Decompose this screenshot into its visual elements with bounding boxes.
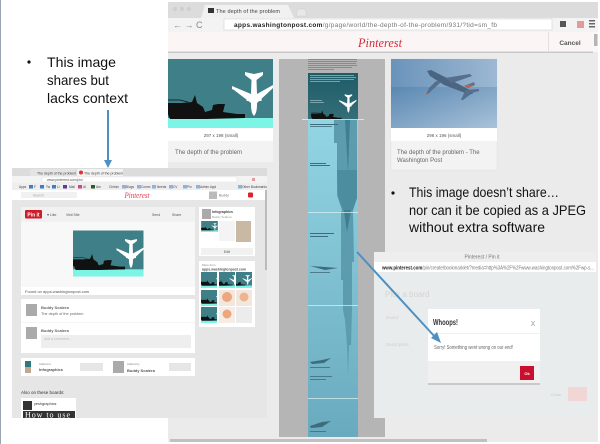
callout: image does not share: without extra software bbox=[408, 219, 545, 235]
infographic intro text lines bbox=[308, 59, 357, 70]
comments card: Buddy Scalera bbox=[41, 305, 70, 310]
faded form behind dialog: Close bbox=[551, 392, 562, 397]
pinterest header: Pinterest bbox=[124, 191, 150, 200]
popup title bar: Pinterest / Pin it bbox=[464, 254, 500, 260]
infographic sky section bbox=[308, 73, 358, 120]
bookmarks bar: Admin Appl bbox=[200, 185, 216, 189]
also on these boards: How to use bbox=[25, 410, 70, 420]
board attribution row: Infographics bbox=[39, 367, 64, 372]
popup url bar bbox=[374, 262, 596, 272]
browser tab strip: The depth of the problem bbox=[216, 9, 280, 15]
pin it button bbox=[25, 210, 42, 218]
sidebar board card: Edit bbox=[224, 250, 230, 254]
browser tab strip bbox=[168, 2, 598, 18]
sidebar more-from-site card bbox=[199, 261, 255, 327]
pinterest header: Search bbox=[33, 194, 44, 198]
sidebar board card bbox=[199, 207, 255, 256]
card: photograph of airliner bbox=[391, 59, 497, 170]
board attribution row: Buddy Scalera bbox=[127, 368, 156, 373]
window tab strip: The depth of the problem bbox=[84, 172, 123, 176]
card: cropped image with plane and ship bbox=[166, 59, 273, 162]
bookmarks bar: Comm bbox=[141, 185, 151, 189]
whoops dialog: X bbox=[531, 321, 536, 328]
pinterest header bar: Cancel bbox=[559, 40, 581, 47]
also on these boards: yeshgraphics bbox=[34, 402, 56, 406]
bookmarks bar: Blogs bbox=[126, 185, 134, 189]
faded form behind dialog: Pick a board bbox=[385, 290, 429, 299]
sidebar more-from-site card: More from bbox=[202, 263, 216, 267]
bookmarks bar: Other Bookmarks bbox=[242, 185, 267, 189]
scrollbar bbox=[594, 34, 598, 46]
window address bar bbox=[12, 176, 267, 183]
card: photograph of airliner: The depth of the problem - The bbox=[397, 150, 480, 156]
comments card: Add a comment... bbox=[44, 337, 71, 341]
bookmarks bar: Tw bbox=[46, 185, 51, 189]
bookmarks bar: CV bbox=[173, 185, 178, 189]
board attribution row: Added to bbox=[39, 362, 51, 366]
window tab strip: The depth of the problem bbox=[37, 172, 76, 176]
bookmarks bar: Needs bbox=[157, 185, 167, 189]
window scrollbar bbox=[265, 190, 267, 270]
window tab strip bbox=[12, 168, 267, 176]
card: cropped image with plane and ship: The depth of the problem bbox=[175, 150, 242, 156]
comments card bbox=[21, 299, 195, 353]
main pin card: Found on apps.washingtonpost.com bbox=[25, 289, 90, 294]
callout: image shares but lacks context: shares but bbox=[47, 72, 109, 88]
pinterest header bar bbox=[168, 32, 598, 53]
faded form behind dialog: Board bbox=[386, 315, 399, 320]
also on these boards bbox=[21, 390, 76, 420]
faded form behind dialog bbox=[385, 290, 587, 401]
bookmarks bar bbox=[12, 183, 267, 190]
bookmarks bar: Am bbox=[96, 185, 101, 189]
bookmarks bar: Li bbox=[57, 185, 60, 189]
pinterest pin page window bbox=[12, 168, 267, 420]
comments card: The depth of the problem bbox=[41, 312, 83, 316]
main pin card: Send bbox=[152, 213, 160, 217]
main pin card: Share bbox=[172, 213, 181, 217]
browser toolbar with address bar: ← → C bbox=[173, 20, 203, 30]
bookmarks bar: F bbox=[34, 185, 36, 189]
browser toolbar with address bar: apps.washingtonpost.com/g/page/world/the-depth-of-the-problem/931/?tid=sm_fb bbox=[234, 22, 497, 29]
pinterest header bar: Pinterest bbox=[357, 35, 402, 50]
whoops dialog bbox=[428, 309, 540, 385]
pinterest header: Buddy bbox=[219, 194, 229, 198]
whoops dialog: Whoops! bbox=[433, 318, 458, 327]
bookmarks bar: Al bbox=[83, 185, 86, 189]
sidebar more-from-site card: apps.washingtonpost.com bbox=[202, 268, 246, 272]
card: photograph of airliner: Washington Post bbox=[397, 158, 442, 164]
card: photograph of airliner: 296 x 196 (small) bbox=[427, 133, 462, 138]
bottom scrollbar bbox=[170, 439, 487, 442]
bookmarks bar: Pin bbox=[187, 185, 192, 189]
arrow: infographic to error dialog bbox=[357, 252, 441, 343]
white slide area left of the browser bbox=[0, 0, 168, 444]
arrow: down to pinterest window bbox=[104, 110, 112, 168]
callout: image does not share: This image doesn’t share… bbox=[409, 184, 559, 200]
pin-it error popup window bbox=[374, 252, 596, 418]
browser toolbar with address bar bbox=[168, 18, 598, 32]
comments card: Buddy Scalera bbox=[41, 328, 70, 333]
sidebar board card: Buddy Scalera bbox=[212, 215, 232, 219]
pinterest header bbox=[12, 190, 265, 200]
sidebar board card: Infographics bbox=[212, 210, 233, 214]
card: cropped image with plane and ship: 297 x 198 (small) bbox=[204, 133, 239, 138]
callout: image shares but lacks context: lacks context bbox=[47, 90, 128, 106]
bookmarks bar: Chimin bbox=[109, 185, 119, 189]
photo: airliner bbox=[425, 70, 479, 100]
callout: image shares but lacks context: This image bbox=[47, 54, 116, 70]
board attribution row: Added by bbox=[127, 362, 140, 366]
also on these boards: Also on these boards: bbox=[21, 390, 65, 395]
pinned image bbox=[73, 230, 144, 276]
infographic ocean section with depth silhouette bbox=[302, 119, 364, 437]
ok button: Ok bbox=[524, 371, 530, 376]
pin it button: Pin it bbox=[27, 212, 40, 218]
main pin card: ♥ Like bbox=[47, 213, 57, 217]
main pin card bbox=[21, 207, 195, 295]
whoops dialog: Sorry! Something went wrong on our end! bbox=[434, 345, 513, 351]
card: tall infographic preview bbox=[170, 59, 586, 442]
main pin card: Visit Site bbox=[66, 213, 80, 217]
bookmarks bar: Mail bbox=[69, 185, 75, 189]
callout: image does not share bbox=[391, 184, 586, 235]
board attribution row bbox=[21, 358, 195, 376]
callout: image does not share: nor can it be copied as a JPEG bbox=[409, 202, 586, 218]
faded form behind dialog: Description bbox=[386, 342, 409, 347]
popup title bar bbox=[374, 252, 596, 262]
callout: image shares but lacks context bbox=[27, 54, 128, 106]
window address bar: www.pinterest.com/pin/ bbox=[47, 178, 83, 182]
bookmarks bar: Apps bbox=[19, 185, 27, 189]
